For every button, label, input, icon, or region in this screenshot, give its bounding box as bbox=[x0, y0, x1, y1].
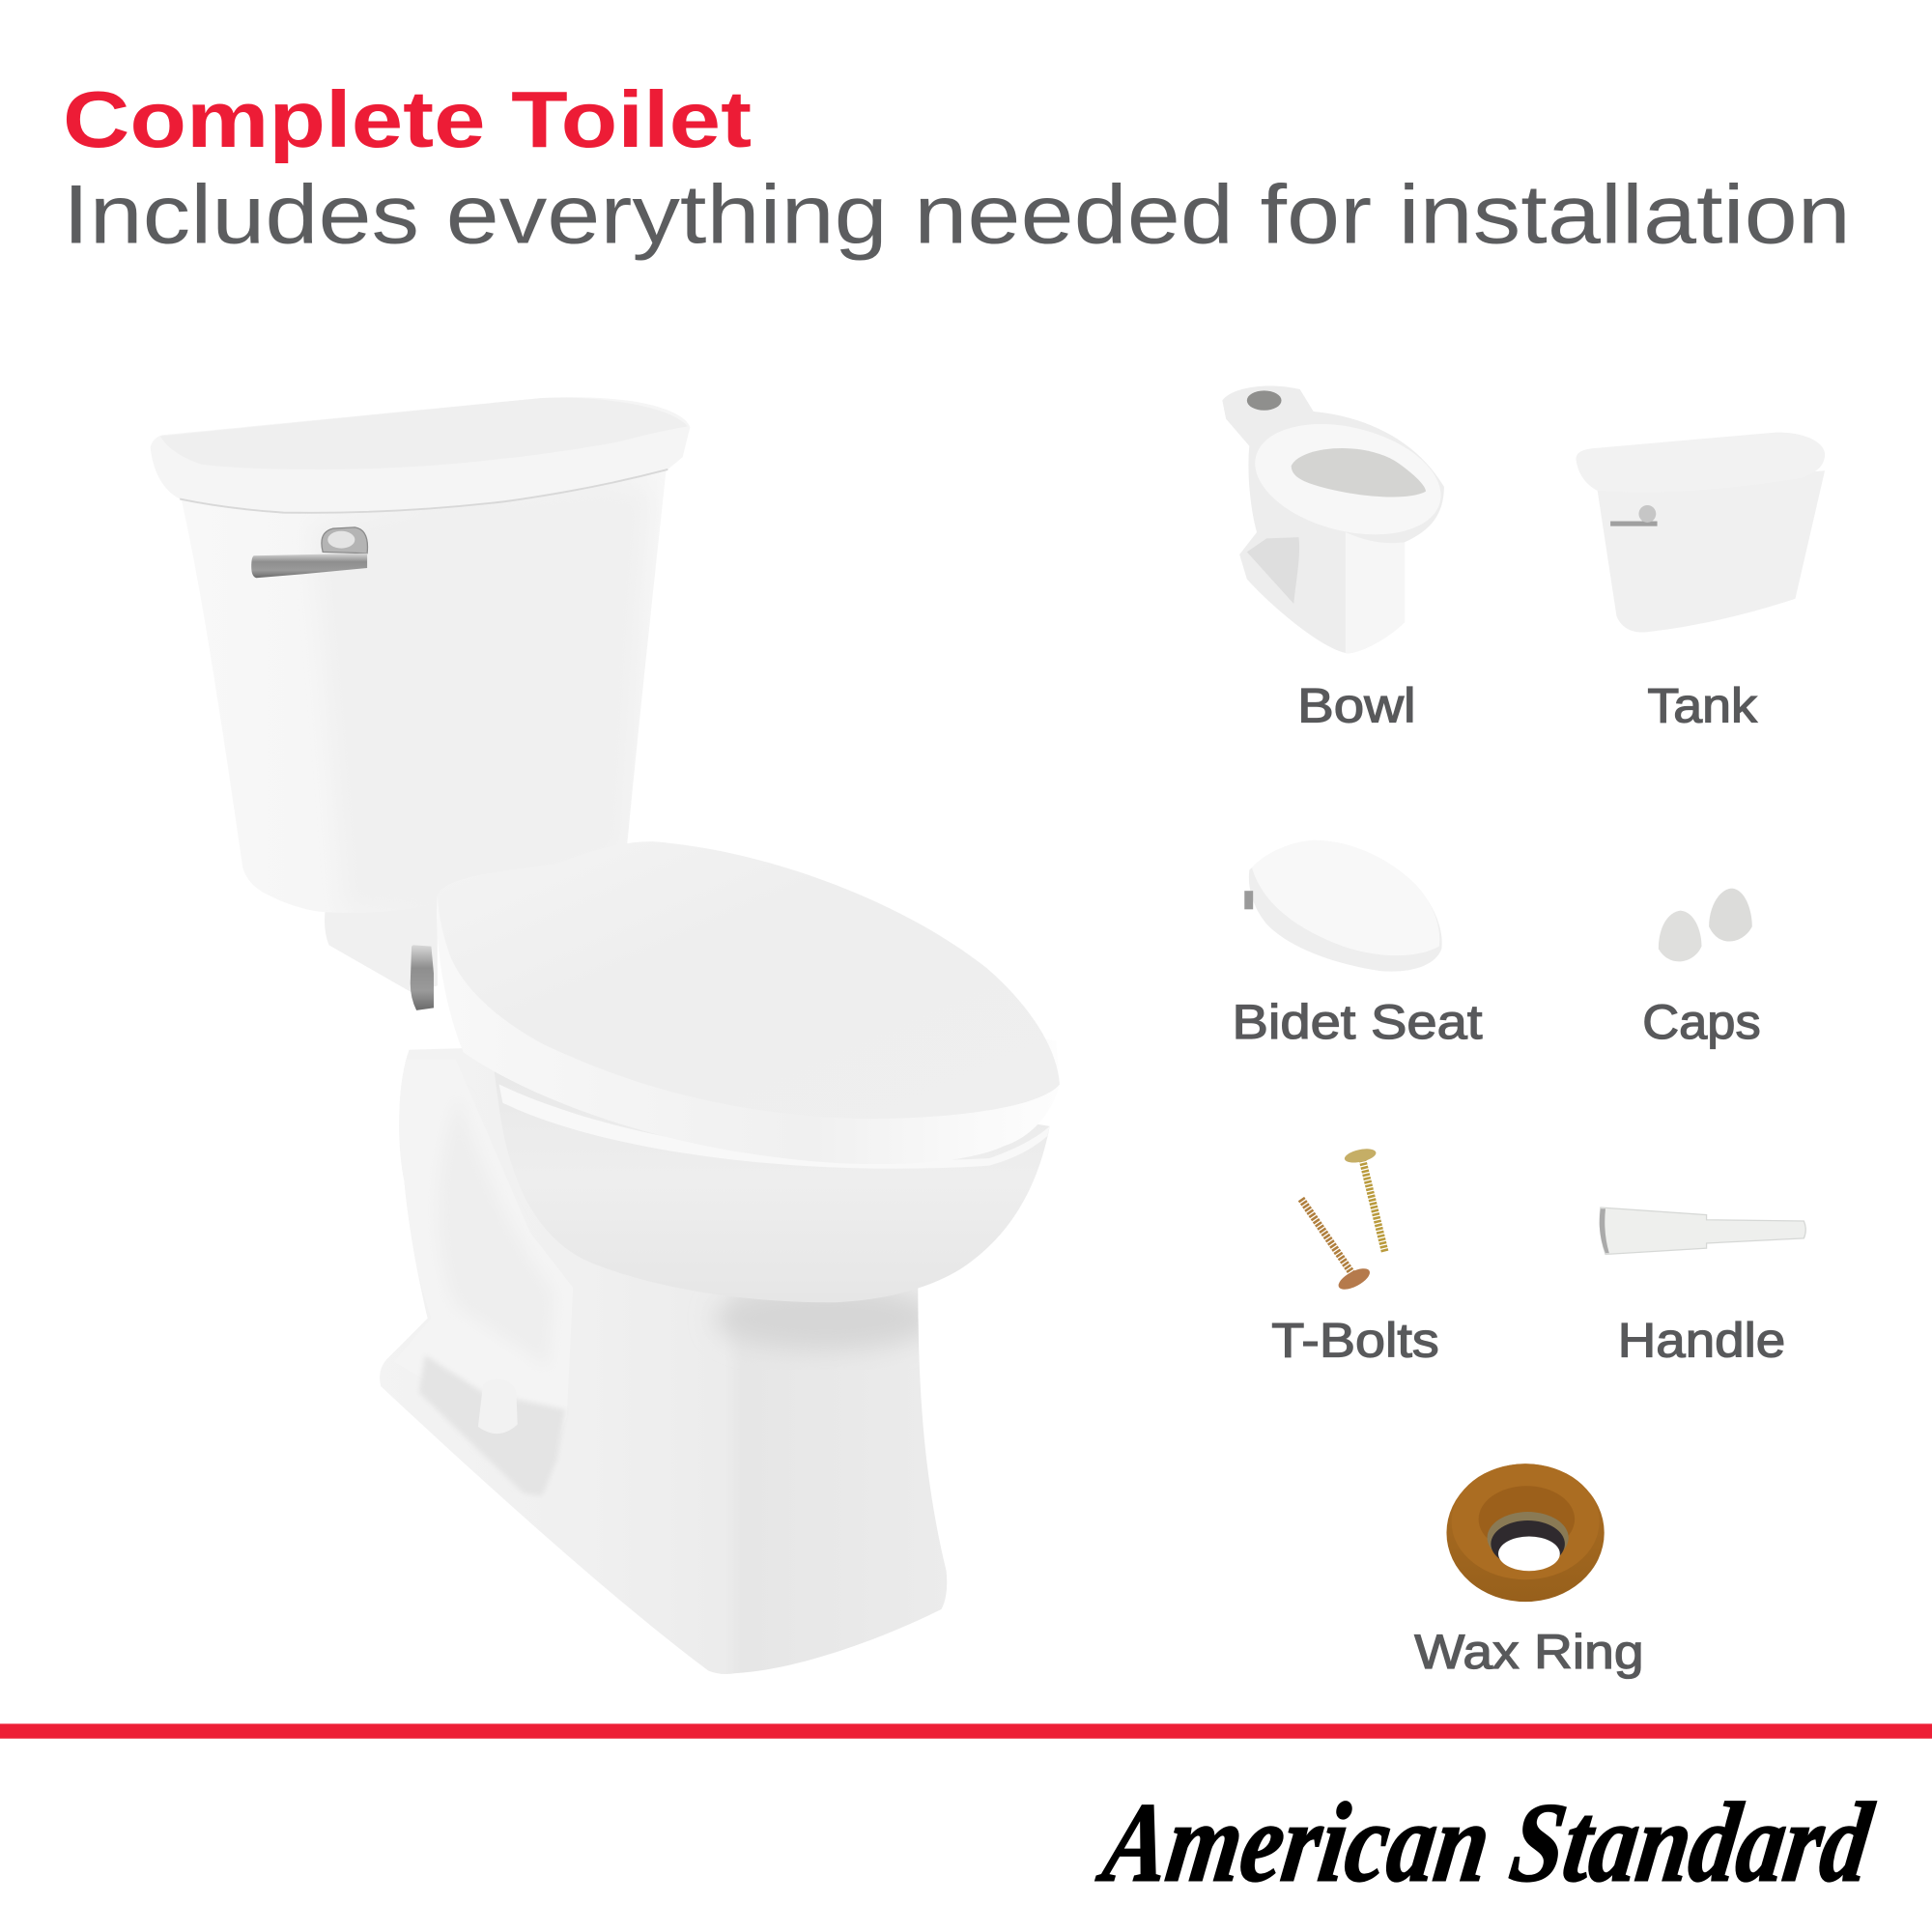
component: handle bbox=[1600, 1208, 1805, 1367]
label: Bowl: Bowl bbox=[1297, 678, 1416, 732]
label: Wax Ring: Wax Ring bbox=[1414, 1625, 1644, 1679]
foot recess bbox=[419, 1355, 565, 1495]
red divider bar bbox=[0, 1723, 1932, 1739]
label: Tank: Tank bbox=[1647, 678, 1757, 732]
handle image bbox=[1600, 1208, 1805, 1254]
bowl bbox=[493, 1060, 1050, 1302]
component: bidet seat bbox=[1233, 840, 1483, 1049]
label: T-Bolts: T-Bolts bbox=[1271, 1313, 1439, 1367]
component: bowl bbox=[1222, 386, 1453, 732]
seat image bbox=[1244, 840, 1442, 972]
wax ring image bbox=[1446, 1463, 1605, 1602]
caps image bbox=[1659, 889, 1752, 961]
bowl image bbox=[1222, 386, 1453, 653]
tank image bbox=[1576, 433, 1825, 633]
title: Complete Toilet bbox=[63, 74, 752, 164]
back lobe shading bbox=[394, 1060, 573, 1485]
main toilet image bbox=[151, 397, 1060, 1688]
seat top face bbox=[438, 841, 1060, 1119]
label: Handle: Handle bbox=[1618, 1313, 1785, 1367]
component: wax ring bbox=[1414, 1463, 1644, 1679]
label: Caps: Caps bbox=[1642, 995, 1761, 1049]
pedestal and foot bbox=[370, 1035, 961, 1688]
floor bolt cap bbox=[478, 1378, 518, 1434]
component: t-bolts bbox=[1271, 1147, 1439, 1367]
seat hinge bbox=[411, 945, 434, 1010]
component: caps bbox=[1642, 889, 1761, 1049]
seat lid bbox=[437, 841, 1060, 1164]
tank lid bbox=[151, 397, 690, 513]
shadow under bowl bbox=[717, 1293, 919, 1352]
bowl rim bbox=[499, 1084, 1050, 1169]
seat side band bbox=[437, 895, 1060, 1164]
tank neck bbox=[325, 899, 438, 993]
subtitle: Includes everything needed for installation bbox=[63, 167, 1851, 261]
bolts image bbox=[1301, 1147, 1385, 1293]
flush handle bbox=[251, 527, 367, 578]
label: Bidet Seat: Bidet Seat bbox=[1233, 995, 1483, 1049]
tank body bbox=[249, 472, 665, 912]
component: tank bbox=[1576, 433, 1825, 732]
